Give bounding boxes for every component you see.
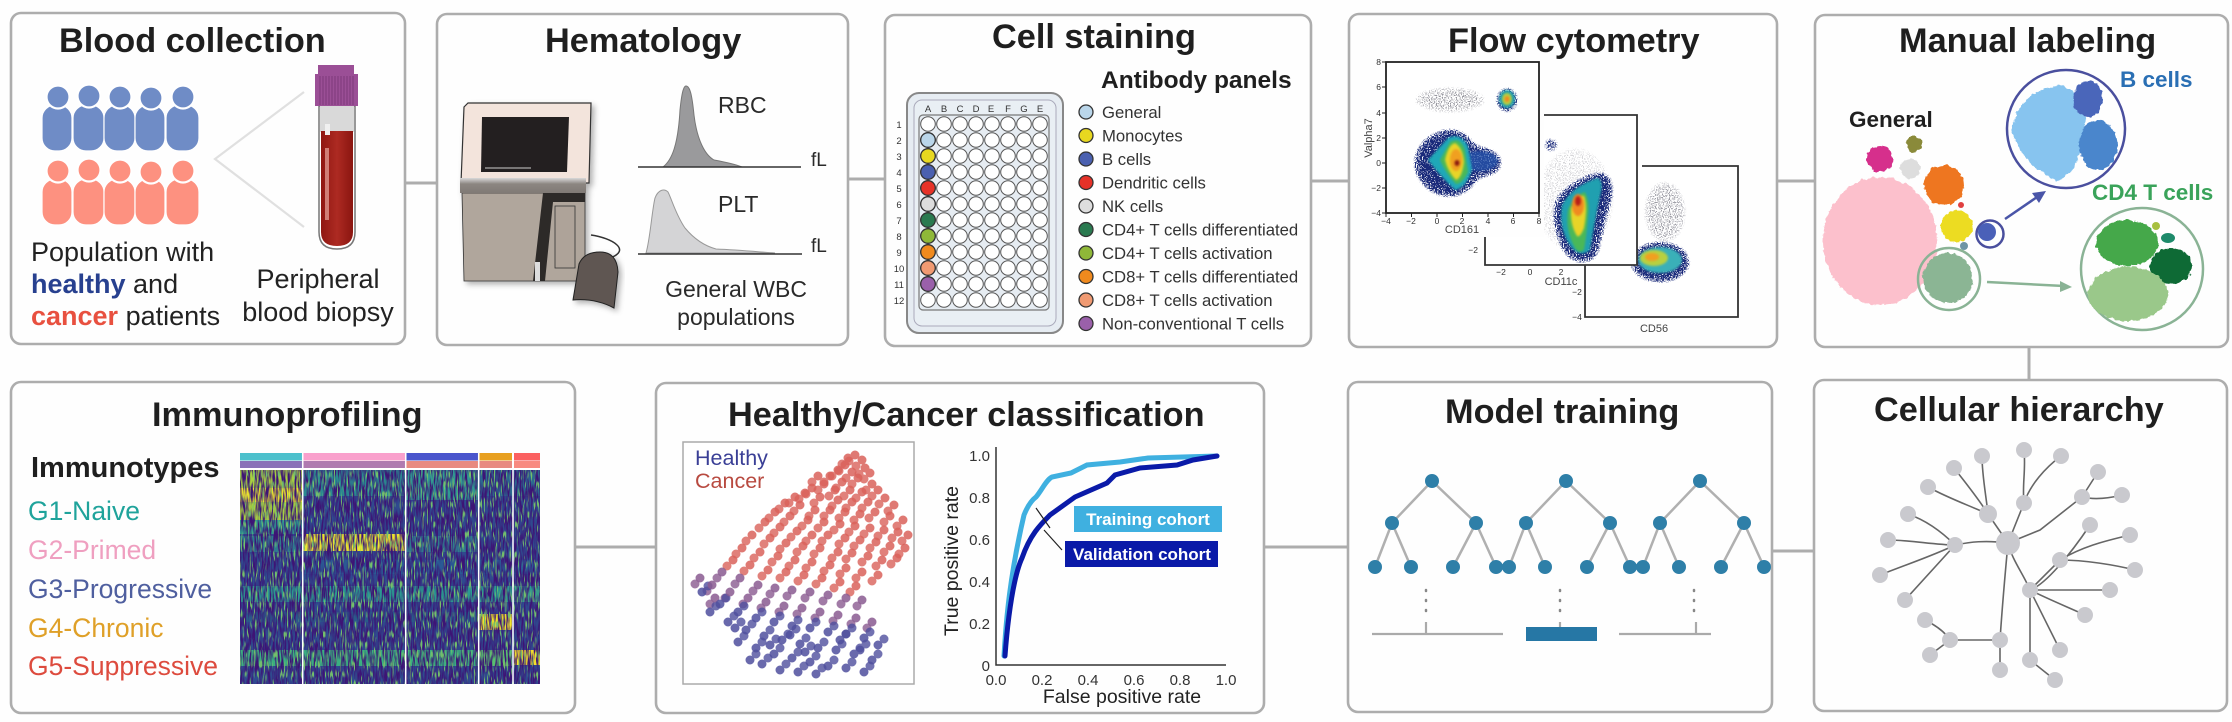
icon: hematology analyzer — [460, 103, 620, 308]
chart: CD161 density plot: −2 — [1371, 183, 1381, 193]
zoom lines from population to tube — [215, 92, 304, 227]
legend: immunotype groups: G2-Primed — [28, 535, 156, 565]
chart: CD56 density plot: CD56 — [1640, 323, 1668, 335]
label: CD4 T cells: CD4 T cells — [2092, 180, 2213, 205]
text: peripheral blood biopsy: blood biopsy — [242, 297, 394, 327]
icon: 96-well plate: 8 — [896, 232, 902, 243]
cluster plot: general populations — [1823, 136, 2004, 310]
chart: RBC distribution — [638, 86, 827, 171]
legend: training cohort — [1074, 506, 1222, 532]
chart: ROC curves: 0.2 — [1032, 672, 1052, 689]
heading: model training: Model training — [1445, 393, 1679, 431]
chart: CD161 density plot — [1360, 57, 1544, 237]
legend: antibody panels: Dendritic cells — [1102, 174, 1206, 192]
connectors between panels — [405, 179, 2029, 551]
chart: ROC curves: 0.8 — [1170, 672, 1190, 689]
diagram: tree ensemble — [1372, 481, 1764, 641]
icon: 96-well plate: B — [941, 104, 947, 115]
chart: PLT distribution — [638, 190, 827, 257]
panel: cellular hierarchy — [1814, 380, 2227, 711]
icon: 96-well plate: 2 — [896, 136, 902, 147]
chart: CD161 density plot: −2 — [1406, 216, 1416, 226]
chart: CD161 density plot: CD161 — [1445, 224, 1479, 236]
icon: 96-well plate: 7 — [896, 216, 902, 227]
heading: flow cytometry: Flow cytometry — [1448, 22, 1700, 60]
legend: antibody panels: Non-conventional T cells — [1102, 314, 1284, 334]
icon: 96-well plate: 3 — [896, 152, 902, 163]
legend: training cohort: Training cohort — [1086, 510, 1210, 529]
legend: antibody panels: Monocytes — [1102, 126, 1183, 146]
icon: 96-well plate: 4 — [896, 168, 902, 179]
chart: ROC curves: 0.4 — [969, 574, 990, 591]
text: peripheral blood biopsy: Peripheral — [256, 264, 380, 294]
chart: ROC curves: 0.6 — [969, 532, 990, 549]
text: population description: healthy and — [31, 269, 178, 299]
panel: manual labeling — [1815, 15, 2228, 347]
icon: 96-well plate: 12 — [894, 296, 904, 307]
chart: ROC curves — [941, 447, 1236, 708]
legend: antibody panels: NK cells — [1102, 197, 1163, 216]
chart: CD161 density plot: 8 — [1376, 57, 1381, 67]
text: general WBC populations: General WBC — [665, 276, 807, 302]
icon: 96-well plate — [894, 93, 1063, 333]
chart: CD161 density plot: 6 — [1511, 216, 1516, 226]
icon: 96-well plate: 6 — [896, 200, 902, 211]
chart: CD161 density plot: −4 — [1371, 208, 1381, 218]
text: population description: Population with — [31, 237, 214, 267]
legend: immunotype groups — [28, 496, 218, 681]
icon: 96-well plate: 11 — [894, 280, 904, 291]
chart: CD161 density plot: −4 — [1381, 216, 1391, 226]
legend: antibody panels: CD4+ T cells differentiated — [1102, 220, 1298, 240]
heading: blood collection: Blood collection — [59, 22, 326, 60]
chart: ROC curves: 0 — [982, 658, 990, 675]
text: peripheral blood biopsy — [242, 264, 394, 327]
label: immunotypes: Immunotypes — [31, 452, 220, 484]
legend: antibody panels: General — [1102, 103, 1161, 122]
heading: classification: Healthy/Cancer classification — [728, 396, 1205, 434]
chart: healthy vs cancer embedding — [683, 442, 914, 684]
arrow: to CD4 T cells — [1987, 281, 2072, 292]
chart: ROC curves: 1.0 — [1216, 672, 1236, 689]
chart: CD161 density plot: 2 — [1460, 216, 1465, 226]
text: population description: cancer patients — [31, 301, 220, 331]
label: general: General — [1849, 107, 1933, 132]
chart: CD161 density plot: Valpha7 — [1363, 118, 1375, 158]
chart: CD11c density plot: −2 — [1496, 267, 1506, 277]
icon: cancer population — [42, 158, 199, 225]
chart: ROC curves: 0.6 — [1124, 672, 1144, 689]
chart: CD161 density plot: 6 — [1376, 82, 1381, 92]
chart: RBC distribution: RBC — [718, 92, 767, 118]
panel: cell staining — [885, 15, 1311, 346]
chart: ROC curves: 0.8 — [969, 490, 990, 507]
legend: antibody panels: CD8+ T cells activation — [1102, 291, 1273, 310]
legend: antibody panels: CD8+ T cells differentiated — [1102, 268, 1298, 286]
icon: 96-well plate: 5 — [896, 184, 902, 195]
icon: healthy population — [42, 84, 199, 151]
legend: immunotype groups: G4-Chronic — [28, 613, 164, 643]
panel: model training — [1348, 382, 1772, 712]
chart: RBC distribution: fL — [811, 150, 827, 171]
chart: CD161 density plot: 8 — [1537, 216, 1542, 226]
chart: ROC curves: 0.0 — [986, 672, 1006, 689]
chart: ROC curves: True positive rate — [941, 486, 963, 636]
legend: antibody panels — [1079, 103, 1298, 334]
legend: antibody panels: CD4+ T cells activation — [1102, 244, 1273, 263]
chart: CD56 density plot: −4 — [1572, 312, 1582, 322]
heading: cellular hierarchy: Cellular hierarchy — [1874, 391, 2164, 429]
chart: ROC curves: 0.4 — [1078, 672, 1098, 689]
icon: 96-well plate: 9 — [896, 248, 902, 259]
chart: CD11c density plot: −2 — [1468, 245, 1478, 255]
label: B cells: B cells — [2120, 67, 2193, 92]
chart: immunotype heatmap — [240, 453, 540, 684]
text: population description — [31, 237, 220, 331]
icon: blood tube — [315, 65, 358, 249]
chart: CD56 density plot — [1572, 166, 1738, 335]
chart: CD161 density plot: 0 — [1376, 158, 1381, 168]
legend: immunotype groups: G5-Suppressive — [28, 651, 218, 681]
legend: immunotype groups: G3-Progressive — [28, 574, 212, 604]
legend: validation cohort: Validation cohort — [1073, 545, 1211, 564]
panel: hematology — [437, 14, 848, 345]
chart: healthy vs cancer embedding: Healthy — [695, 446, 768, 470]
heading: hematology: Hematology — [545, 22, 741, 60]
chart: CD161 density plot: 2 — [1376, 133, 1381, 143]
chart: CD56 density plot: −2 — [1572, 287, 1582, 297]
chart: PLT distribution: fL — [811, 236, 827, 257]
icon: 96-well plate: F — [1005, 104, 1011, 115]
chart: healthy vs cancer embedding: Cancer — [695, 469, 764, 493]
chart: CD161 density plot: 4 — [1376, 108, 1381, 118]
icon: 96-well plate: E — [988, 104, 994, 115]
icon: 96-well plate: C — [957, 104, 964, 115]
chart: ROC curves: False positive rate — [1043, 686, 1201, 708]
chart: CD161 density plot: 0 — [1435, 216, 1440, 226]
legend: validation cohort — [1065, 541, 1218, 567]
text: general WBC populations: populations — [677, 304, 795, 330]
cluster plot: B cells — [2007, 70, 2125, 188]
panel: immunoprofiling — [11, 382, 575, 713]
legend: immunotype groups: G1-Naive — [28, 496, 140, 526]
chart: CD11c density plot — [1468, 115, 1637, 288]
panel: healthy/cancer classification — [656, 383, 1264, 713]
chart: CD11c density plot: 0 — [1528, 267, 1533, 277]
icon: 96-well plate: A — [925, 104, 932, 115]
icon: 96-well plate: G — [1020, 104, 1028, 115]
text: general WBC populations — [665, 276, 807, 330]
icon: 96-well plate: D — [973, 104, 980, 115]
diagram: hierarchy tree — [1880, 450, 2135, 680]
chart: CD11c density plot: CD11c — [1545, 276, 1578, 288]
heading: antibody panels: Antibody panels — [1101, 67, 1292, 94]
icon: 96-well plate: 1 — [896, 120, 902, 131]
chart: ROC curves: 1.0 — [969, 448, 990, 465]
chart: CD161 density plot: 4 — [1486, 216, 1491, 226]
chart: ROC curves: 0.2 — [969, 616, 990, 633]
panel: flow cytometry — [1349, 14, 1777, 347]
heading: cell staining: Cell staining — [992, 18, 1196, 56]
heading: immunoprofiling: Immunoprofiling — [152, 396, 423, 434]
panel: blood collection — [11, 13, 405, 344]
legend: antibody panels: B cells — [1102, 150, 1151, 169]
icon: 96-well plate: E — [1037, 104, 1043, 115]
icon: 96-well plate: 10 — [894, 264, 904, 275]
arrow: to B cells — [2005, 191, 2046, 219]
chart: PLT distribution: PLT — [718, 191, 758, 217]
cluster plot: CD4 T cells — [2081, 208, 2203, 330]
chart: CD11c density plot: 2 — [1559, 267, 1564, 277]
heading: manual labeling: Manual labeling — [1899, 22, 2156, 60]
